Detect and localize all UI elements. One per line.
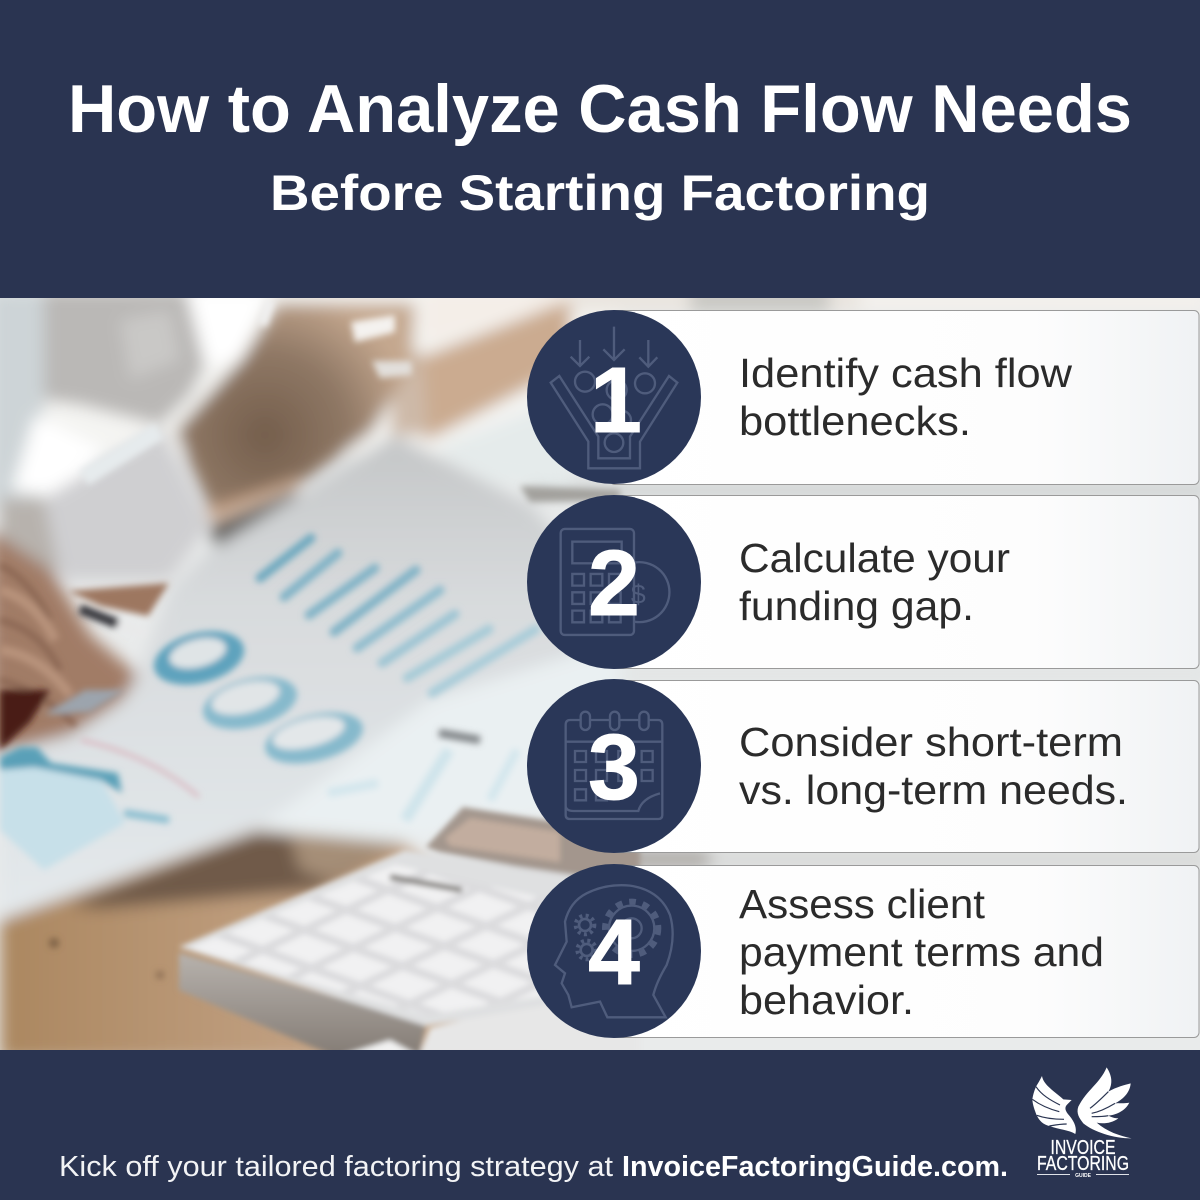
- blurred photo of financial documents and calculator: [0, 285, 1200, 1060]
- fingers: [0, 530, 138, 755]
- badge 1: funnel icon with number: [527, 310, 701, 484]
- step card 1: [610, 310, 1199, 484]
- step card 3: [610, 680, 1199, 852]
- step card 3: vs. long-term needs.: [739, 767, 1128, 813]
- step card 4: behavior.: [739, 977, 914, 1023]
- badge 2: calculator and coin icon with number: [527, 495, 701, 669]
- badge 2: calculator and coin icon with number: 2: [588, 531, 640, 635]
- shirt: [0, 290, 44, 505]
- step card 4: payment terms and: [739, 929, 1104, 975]
- paper: [0, 435, 620, 920]
- calculator: [179, 807, 640, 1056]
- bars on document: [260, 538, 536, 693]
- donut charts: [150, 626, 248, 690]
- step card 1: Identify cash flow: [739, 350, 1072, 396]
- step card 2: Calculate your: [739, 535, 1010, 581]
- cuff: [0, 498, 61, 575]
- step card 2: funding gap.: [739, 583, 974, 629]
- step card 4: [610, 866, 1199, 1038]
- step card 4: Assess client: [739, 881, 986, 927]
- footer website: InvoiceFactoringGuide.com.: [622, 1151, 1008, 1183]
- step card 1: bottlenecks.: [739, 398, 971, 444]
- badge 1: funnel icon with number: 1: [590, 348, 642, 452]
- step card 2: [610, 496, 1199, 668]
- wood: [0, 830, 560, 1060]
- title: How to Analyze Cash Flow Needs: [68, 71, 1132, 147]
- logo: eagle with wordmark: GUIDE: [1075, 1173, 1092, 1179]
- badge 4: head with gears icon with number: 4: [588, 900, 640, 1004]
- step card 3: Consider short-term: [739, 719, 1123, 765]
- badge 3: calendar icon with number: 3: [588, 715, 640, 819]
- light chart area on document: [0, 767, 125, 870]
- badge 2: calculator and coin icon with number: $: [631, 579, 646, 609]
- badge 4: head with gears icon with number: [527, 864, 701, 1038]
- logo: eagle with wordmark: FACTORING: [1037, 1153, 1129, 1175]
- subtitle: Before Starting Factoring: [270, 165, 930, 221]
- logo: eagle with wordmark: [1032, 1067, 1132, 1179]
- hand: [176, 303, 415, 508]
- footer call to action: Kick off your tailored factoring strategy at: [59, 1151, 613, 1183]
- badge 3: calendar icon with number: [527, 679, 701, 853]
- arm: [419, 300, 570, 441]
- logo: eagle with wordmark: INVOICE: [1050, 1137, 1116, 1159]
